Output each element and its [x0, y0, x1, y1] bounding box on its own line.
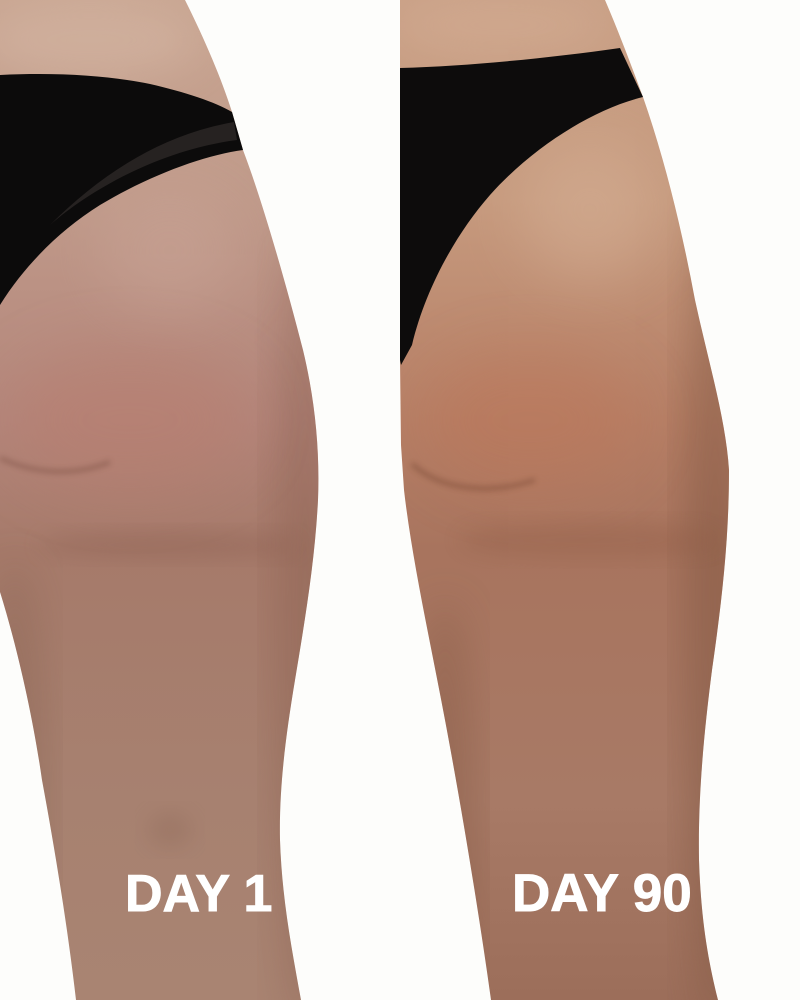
label: day 1: DAY 1 — [125, 865, 272, 923]
body: day 90 — [390, 0, 745, 1000]
garment: day 1 — [0, 74, 243, 305]
label: day 90: DAY 90 — [512, 864, 692, 923]
garment: day 90 — [400, 48, 643, 365]
panel: day 90 photo — [390, 0, 745, 1000]
body: day 1 — [0, 0, 335, 1000]
lace trim — [50, 122, 237, 225]
panel: day 1 photo — [0, 0, 335, 1000]
